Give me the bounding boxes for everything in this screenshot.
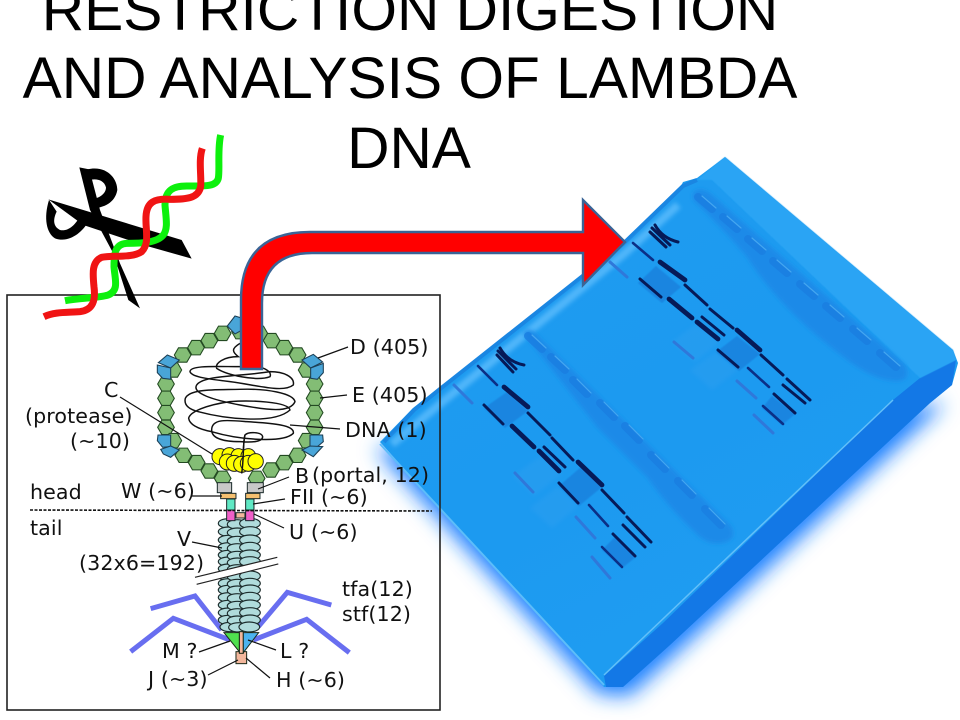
- lower comb wells: [523, 330, 733, 543]
- diagram labels: M ?: [162, 639, 198, 663]
- diagram labels: D (405): [350, 335, 428, 359]
- phage head: [157, 316, 323, 486]
- green DNA strand: [65, 135, 221, 301]
- title: AND ANALYSIS OF LAMBDA: [23, 46, 798, 111]
- title: DNA: [347, 116, 472, 181]
- gel upper-left edge shading: [384, 180, 697, 442]
- diagram labels: tfa(12): [342, 577, 413, 601]
- gel photograph: [380, 157, 958, 692]
- leader lines: [120, 347, 348, 678]
- diagram labels: tail: [30, 516, 63, 540]
- diagram labels: [25, 335, 429, 692]
- scissors: [46, 167, 192, 308]
- DNA coil: [185, 343, 295, 473]
- blue capsid vertices: [157, 316, 323, 457]
- head and tail divider: [30, 510, 432, 511]
- yellow portal spheres: [212, 448, 263, 472]
- upper gel DNA bands: [610, 225, 810, 433]
- title: [23, 0, 798, 181]
- gel lower front lip: [604, 360, 956, 687]
- icon: scissors cutting DNA: [44, 135, 221, 317]
- tail tube discs: [218, 518, 260, 632]
- diagram labels: (portal, 12): [312, 463, 429, 487]
- arrow: digest to gel: [241, 200, 625, 369]
- diagram labels: H (~6): [276, 668, 345, 692]
- lane shading patches: [484, 266, 795, 568]
- diagram labels: stf(12): [342, 602, 411, 626]
- diagram labels: B: [295, 464, 309, 488]
- diagram labels: W (~6): [121, 479, 195, 503]
- diagram labels: V: [177, 527, 191, 551]
- diagram labels: C: [104, 378, 118, 402]
- gel body: [380, 157, 958, 687]
- panel: lambda phage diagram frame: [7, 295, 440, 710]
- diagram labels: FII (~6): [290, 485, 368, 509]
- upper comb wells: [693, 189, 907, 381]
- diagram labels: U (~6): [289, 520, 358, 544]
- diagram labels: E (405): [352, 383, 428, 407]
- diagram labels: L ?: [280, 639, 309, 663]
- tail fibers: [131, 592, 349, 653]
- gel upper edge band: [697, 157, 956, 378]
- lower gel DNA bands: [454, 348, 651, 578]
- capsid hexagons: [158, 324, 323, 486]
- diagram labels: head: [30, 480, 82, 504]
- diagram labels: (~10): [70, 429, 130, 453]
- tail tip proteins: [224, 632, 259, 664]
- tail break marks: [195, 557, 278, 584]
- collar proteins: [217, 483, 263, 521]
- diagram labels: J (~3): [146, 667, 208, 691]
- diagram labels: (32x6=192): [79, 551, 204, 575]
- diagram labels: (protease): [25, 404, 133, 428]
- diagram labels: DNA (1): [345, 418, 427, 442]
- phage tail: [131, 483, 349, 664]
- red DNA strand: [44, 148, 202, 317]
